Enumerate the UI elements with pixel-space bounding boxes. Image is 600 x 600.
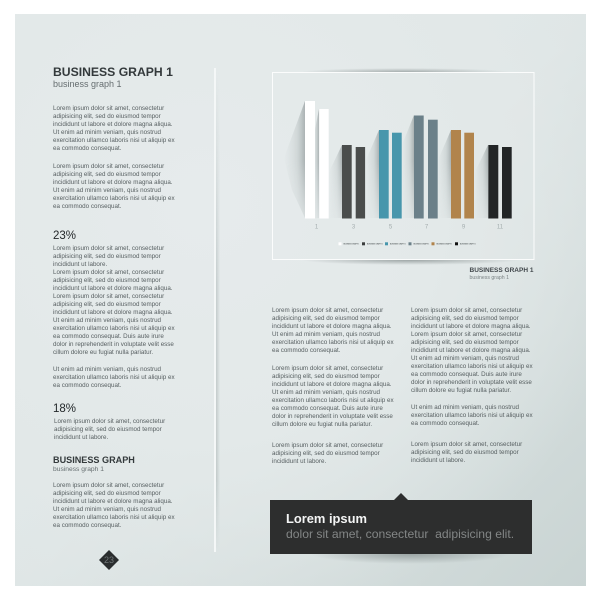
left paragraph 5: Lorem ipsum dolor sit amet, consectetur <box>54 418 165 425</box>
axis labels: 1 <box>315 224 319 230</box>
left paragraph 2: adipisicing elit, sed do eiusmod tempor <box>53 171 161 178</box>
chart caption title: BUSINESS GRAPH 1 <box>470 267 533 274</box>
axis labels <box>315 224 504 230</box>
right column 1 paragraph 2: dolor in reprehenderit in voluptate velit esse <box>272 413 393 420</box>
chart bottom shadow <box>300 260 520 265</box>
right column 1 paragraph 3 <box>272 442 384 465</box>
right column 1 paragraph 1: adipisicing elit, sed do eiusmod tempor <box>272 315 380 322</box>
left paragraph 6: Ut enim ad minim veniam, quis nostrud <box>53 506 161 513</box>
bar group 9: tan <box>438 130 474 218</box>
right column 1 paragraph 1: Ut enim ad minim veniam, quis nostrud <box>272 331 380 338</box>
chart panel <box>272 72 534 260</box>
left paragraph 3: adipisicing elit, sed do eiusmod tempor <box>53 253 161 260</box>
left paragraph 6: exercitation ullamco laboris nisi ut aliquip ex <box>53 514 175 521</box>
left paragraph 4: Ut enim ad minim veniam, quis nostrud <box>53 366 161 373</box>
axis labels: 3 <box>352 224 356 230</box>
right column 2 paragraph 1: incididunt ut labore et dolore magna aliqua. <box>411 347 531 354</box>
left paragraph 3: adipisicing elit, sed do eiusmod tempor <box>53 277 161 284</box>
right column 1 paragraph 3: adipisicing elit, sed do eiusmod tempor <box>272 450 380 457</box>
axis labels: 11 <box>497 224 504 230</box>
right column 2 paragraph 1: Lorem ipsum dolor sit amet, consectetur <box>411 331 522 338</box>
left paragraph 3: exercitation ullamco laboris nisi ut aliquip ex <box>53 325 175 332</box>
right column 1 paragraph 2: Ut enim ad minim veniam, quis nostrud <box>272 389 380 396</box>
right column 2 paragraph 2 <box>411 404 533 426</box>
right column 1 paragraph 2: adipisicing elit, sed do eiusmod tempor <box>272 373 380 380</box>
right column 1 paragraph 1: exercitation ullamco laboris nisi ut aliquip ex <box>272 339 394 346</box>
left heading: BUSINESS GRAPH 1 <box>53 65 173 79</box>
vertical divider shadow <box>216 118 219 534</box>
legend: BUSINESS GRAPH 1 <box>460 242 476 245</box>
right column 2 paragraph 1: adipisicing elit, sed do eiusmod tempor <box>411 339 519 346</box>
left paragraph 1: exercitation ullamco laboris nisi ut aliquip ex <box>53 137 175 144</box>
bar group 7: slate <box>402 115 438 218</box>
axis labels: 5 <box>389 224 393 230</box>
left paragraph 5: adipisicing elit, sed do eiusmod tempor <box>54 426 162 433</box>
left paragraph 2: Lorem ipsum dolor sit amet, consectetur <box>53 163 164 170</box>
legend: BUSINESS GRAPH 1 <box>367 242 383 245</box>
vertical divider <box>214 68 216 552</box>
right column 2 paragraph 1 <box>411 307 533 394</box>
right column 2 paragraph 1: Ut enim ad minim veniam, quis nostrud <box>411 355 519 362</box>
left subheading: business graph 1 <box>53 79 122 89</box>
right column 2 paragraph 2: Ut enim ad minim veniam, quis nostrud <box>411 404 519 410</box>
right column 2 paragraph 1: ea commodo consequat. Duis aute irure <box>411 371 522 378</box>
legend <box>338 242 476 245</box>
right column 2 paragraph 1: dolor in reprehenderit in voluptate velit esse <box>411 379 532 386</box>
callout <box>270 493 532 554</box>
legend: BUSINESS GRAPH 1 <box>436 242 452 245</box>
right column 1 paragraph 2 <box>272 365 394 428</box>
left paragraph 2: incididunt ut labore et dolore magna aliqua. <box>53 179 173 186</box>
right column 1 paragraph 1: Lorem ipsum dolor sit amet, consectetur <box>272 307 383 314</box>
bar group 11: black <box>475 145 512 218</box>
right column 2 paragraph 1: cillum dolore eu fugiat nulla pariatur. <box>411 387 511 394</box>
chart top shadow <box>300 68 510 72</box>
right column 2 paragraph 3 <box>411 441 522 464</box>
right column 2 paragraph 1: exercitation ullamco laboris nisi ut aliquip ex <box>411 363 533 370</box>
chart caption subtitle: business graph 1 <box>470 275 509 281</box>
left paragraph 2: Ut enim ad minim veniam, quis nostrud <box>53 187 161 194</box>
left paragraph 1: ea commodo consequat. <box>53 145 121 152</box>
right column 1 paragraph 2: ea commodo consequat. Duis aute irure <box>272 405 383 412</box>
callout title: Lorem ipsum <box>286 511 367 526</box>
bar group 3: charcoal <box>329 145 365 218</box>
right column 2 paragraph 3: adipisicing elit, sed do eiusmod tempor <box>411 449 519 456</box>
left secondary heading: BUSINESS GRAPH <box>53 455 135 465</box>
left paragraph 3: dolor in reprehenderit in voluptate velit esse <box>53 341 174 348</box>
left paragraph 3: incididunt ut labore et dolore magna aliqua. <box>53 309 173 316</box>
left paragraph 4 <box>53 366 175 389</box>
left paragraph 3: Lorem ipsum dolor sit amet, consectetur <box>53 245 164 252</box>
left paragraph 5 <box>54 418 166 441</box>
left paragraph 3: incididunt ut labore et dolore magna aliqua. <box>53 285 173 292</box>
left paragraph 3: Lorem ipsum dolor sit amet, consectetur <box>53 269 164 276</box>
legend: BUSINESS GRAPH 1 <box>390 242 406 245</box>
left paragraph 6: incididunt ut labore et dolore magna aliqua. <box>53 498 173 505</box>
stat 23%: 23% <box>53 230 76 242</box>
right column 1 paragraph 3: Lorem ipsum dolor sit amet, consectetur <box>272 442 383 449</box>
right column 1 paragraph 2: incididunt ut labore et dolore magna aliqua. <box>272 381 392 388</box>
left paragraph 5: incididunt ut labore. <box>54 434 108 441</box>
left paragraph 3: incididunt ut labore. <box>53 261 107 268</box>
left paragraph 4: exercitation ullamco laboris nisi ut aliquip ex <box>53 374 175 381</box>
left paragraph 6: Lorem ipsum dolor sit amet, consectetur <box>53 482 164 489</box>
left secondary subheading: business graph 1 <box>53 466 104 472</box>
left paragraph 3: Lorem ipsum dolor sit amet, consectetur <box>53 293 164 300</box>
left paragraph 6: adipisicing elit, sed do eiusmod tempor <box>53 490 161 497</box>
left paragraph 1: Lorem ipsum dolor sit amet, consectetur <box>53 105 164 112</box>
left paragraph 3: Ut enim ad minim veniam, quis nostrud <box>53 317 161 324</box>
right column 1 paragraph 1: ea commodo consequat. <box>272 347 340 354</box>
chart frame <box>272 72 534 260</box>
right column 2 paragraph 3: incididunt ut labore. <box>411 457 465 464</box>
legend: BUSINESS GRAPH 1 <box>344 242 359 245</box>
right column 1 paragraph 2: cillum dolore eu fugiat nulla pariatur. <box>272 421 372 428</box>
left paragraph 3: cillum dolore eu fugiat nulla pariatur. <box>53 349 153 356</box>
left paragraph 2: ea commodo consequat. <box>53 203 121 210</box>
left paragraph 4: ea commodo consequat. <box>53 382 121 389</box>
axis labels: 7 <box>425 224 429 230</box>
left paragraph 1: incididunt ut labore et dolore magna aliqua. <box>53 121 173 128</box>
right column 1 paragraph 1 <box>272 307 394 354</box>
left paragraph 1: adipisicing elit, sed do eiusmod tempor <box>53 113 161 120</box>
page number badge <box>99 550 119 570</box>
right column 2 paragraph 1: adipisicing elit, sed do eiusmod tempor <box>411 315 519 322</box>
right column 2 paragraph 1: incididunt ut labore et dolore magna aliqua. <box>411 323 531 330</box>
page number badge: 23 <box>104 555 114 565</box>
left paragraph 6: ea commodo consequat. <box>53 522 121 529</box>
left paragraph 2 <box>53 163 175 210</box>
right column 2 paragraph 3: Lorem ipsum dolor sit amet, consectetur <box>411 441 522 448</box>
left paragraph 3: ea commodo consequat. Duis aute irure <box>53 333 164 340</box>
right column 2 paragraph 2: ea commodo consequat. <box>411 420 479 426</box>
left paragraph 6 <box>53 482 175 529</box>
right column 1 paragraph 3: incididunt ut labore. <box>272 458 326 465</box>
right column 1 paragraph 2: exercitation ullamco laboris nisi ut aliquip ex <box>272 397 394 404</box>
bar group 1: white <box>290 101 329 218</box>
callout shadow <box>310 554 510 564</box>
right column 1 paragraph 1: incididunt ut labore et dolore magna aliqua. <box>272 323 392 330</box>
callout text: dolor sit amet, consectetur adipisicing elit. <box>286 527 514 541</box>
left paragraph 1: Ut enim ad minim veniam, quis nostrud <box>53 129 161 136</box>
stat 18%: 18% <box>53 403 76 415</box>
left paragraph 2: exercitation ullamco laboris nisi ut aliquip ex <box>53 195 175 202</box>
callout pointer <box>394 493 408 500</box>
left paragraph 1 <box>53 105 175 152</box>
right column 2 paragraph 1: Lorem ipsum dolor sit amet, consectetur <box>411 307 522 314</box>
left paragraph 3: adipisicing elit, sed do eiusmod tempor <box>53 301 161 308</box>
right column 1 paragraph 2: Lorem ipsum dolor sit amet, consectetur <box>272 365 383 372</box>
left paragraph 3 <box>53 245 175 356</box>
axis labels: 9 <box>462 224 466 230</box>
legend: BUSINESS GRAPH 1 <box>414 242 429 245</box>
right column 2 paragraph 2: exercitation ullamco laboris nisi ut aliquip ex <box>411 412 533 418</box>
bar group 5: blue <box>366 130 402 218</box>
